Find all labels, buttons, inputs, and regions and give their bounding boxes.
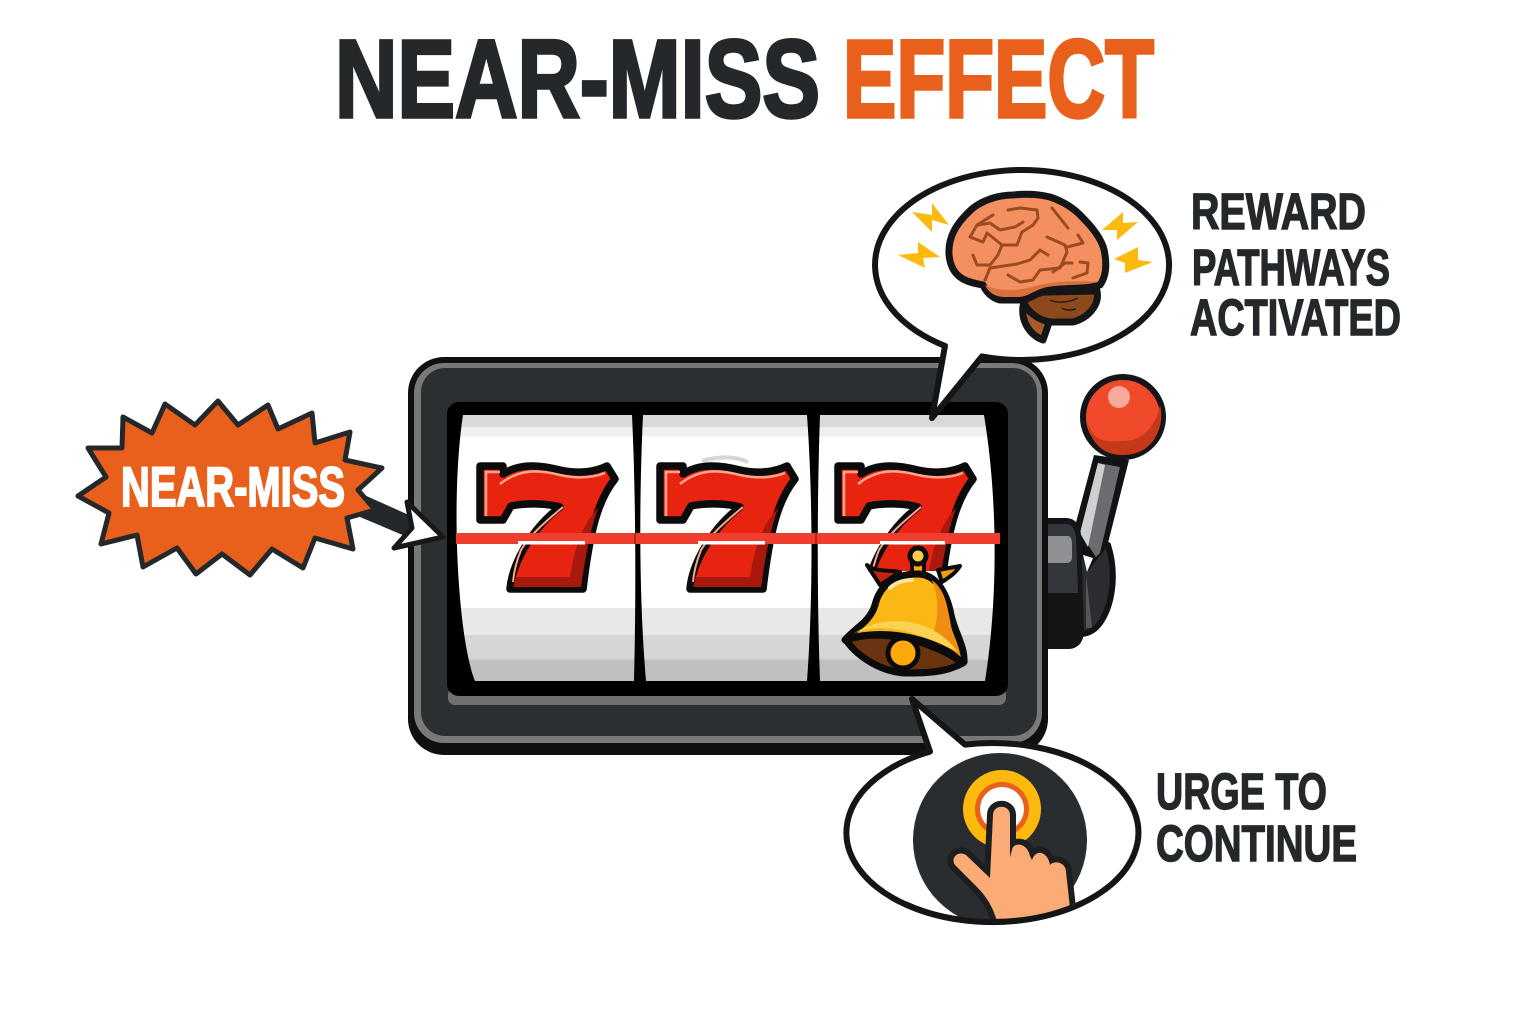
lever bbox=[1045, 377, 1163, 649]
machine cabinet bbox=[408, 357, 1048, 755]
slot machine bbox=[408, 357, 1048, 755]
title: NEAR-MISS bbox=[335, 18, 820, 141]
reward label: REWARD bbox=[1191, 183, 1366, 240]
urge label: URGE TO bbox=[1156, 763, 1327, 820]
reel 2 bbox=[640, 415, 812, 681]
icon: brain bbox=[949, 194, 1106, 340]
urge label: CONTINUE bbox=[1156, 815, 1357, 872]
arrow bbox=[360, 494, 443, 548]
payline bbox=[456, 533, 1000, 544]
bubble bbox=[846, 699, 1138, 922]
burst label: NEAR-MISS bbox=[121, 455, 345, 518]
icon: bell bbox=[845, 548, 964, 673]
bubble bbox=[875, 170, 1169, 418]
icon: lightning bolts bbox=[898, 203, 1153, 273]
callout: reward bubble bbox=[875, 170, 1169, 418]
reel 1 bbox=[457, 415, 635, 681]
urge label bbox=[1156, 763, 1357, 872]
callout: near-miss burst bbox=[78, 401, 443, 575]
reward label: ACTIVATED bbox=[1190, 289, 1401, 346]
lever knob bbox=[1083, 377, 1163, 457]
reel 3 bbox=[818, 415, 995, 681]
reel window bbox=[447, 402, 1008, 696]
icon: pressing hand on button bbox=[905, 753, 1087, 927]
reward label: PATHWAYS bbox=[1192, 239, 1390, 296]
title: EFFECT bbox=[843, 18, 1154, 141]
callout: urge bubble bbox=[846, 699, 1138, 927]
burst shape bbox=[78, 401, 382, 575]
lever base bbox=[1045, 518, 1084, 649]
reward label bbox=[1190, 183, 1401, 346]
